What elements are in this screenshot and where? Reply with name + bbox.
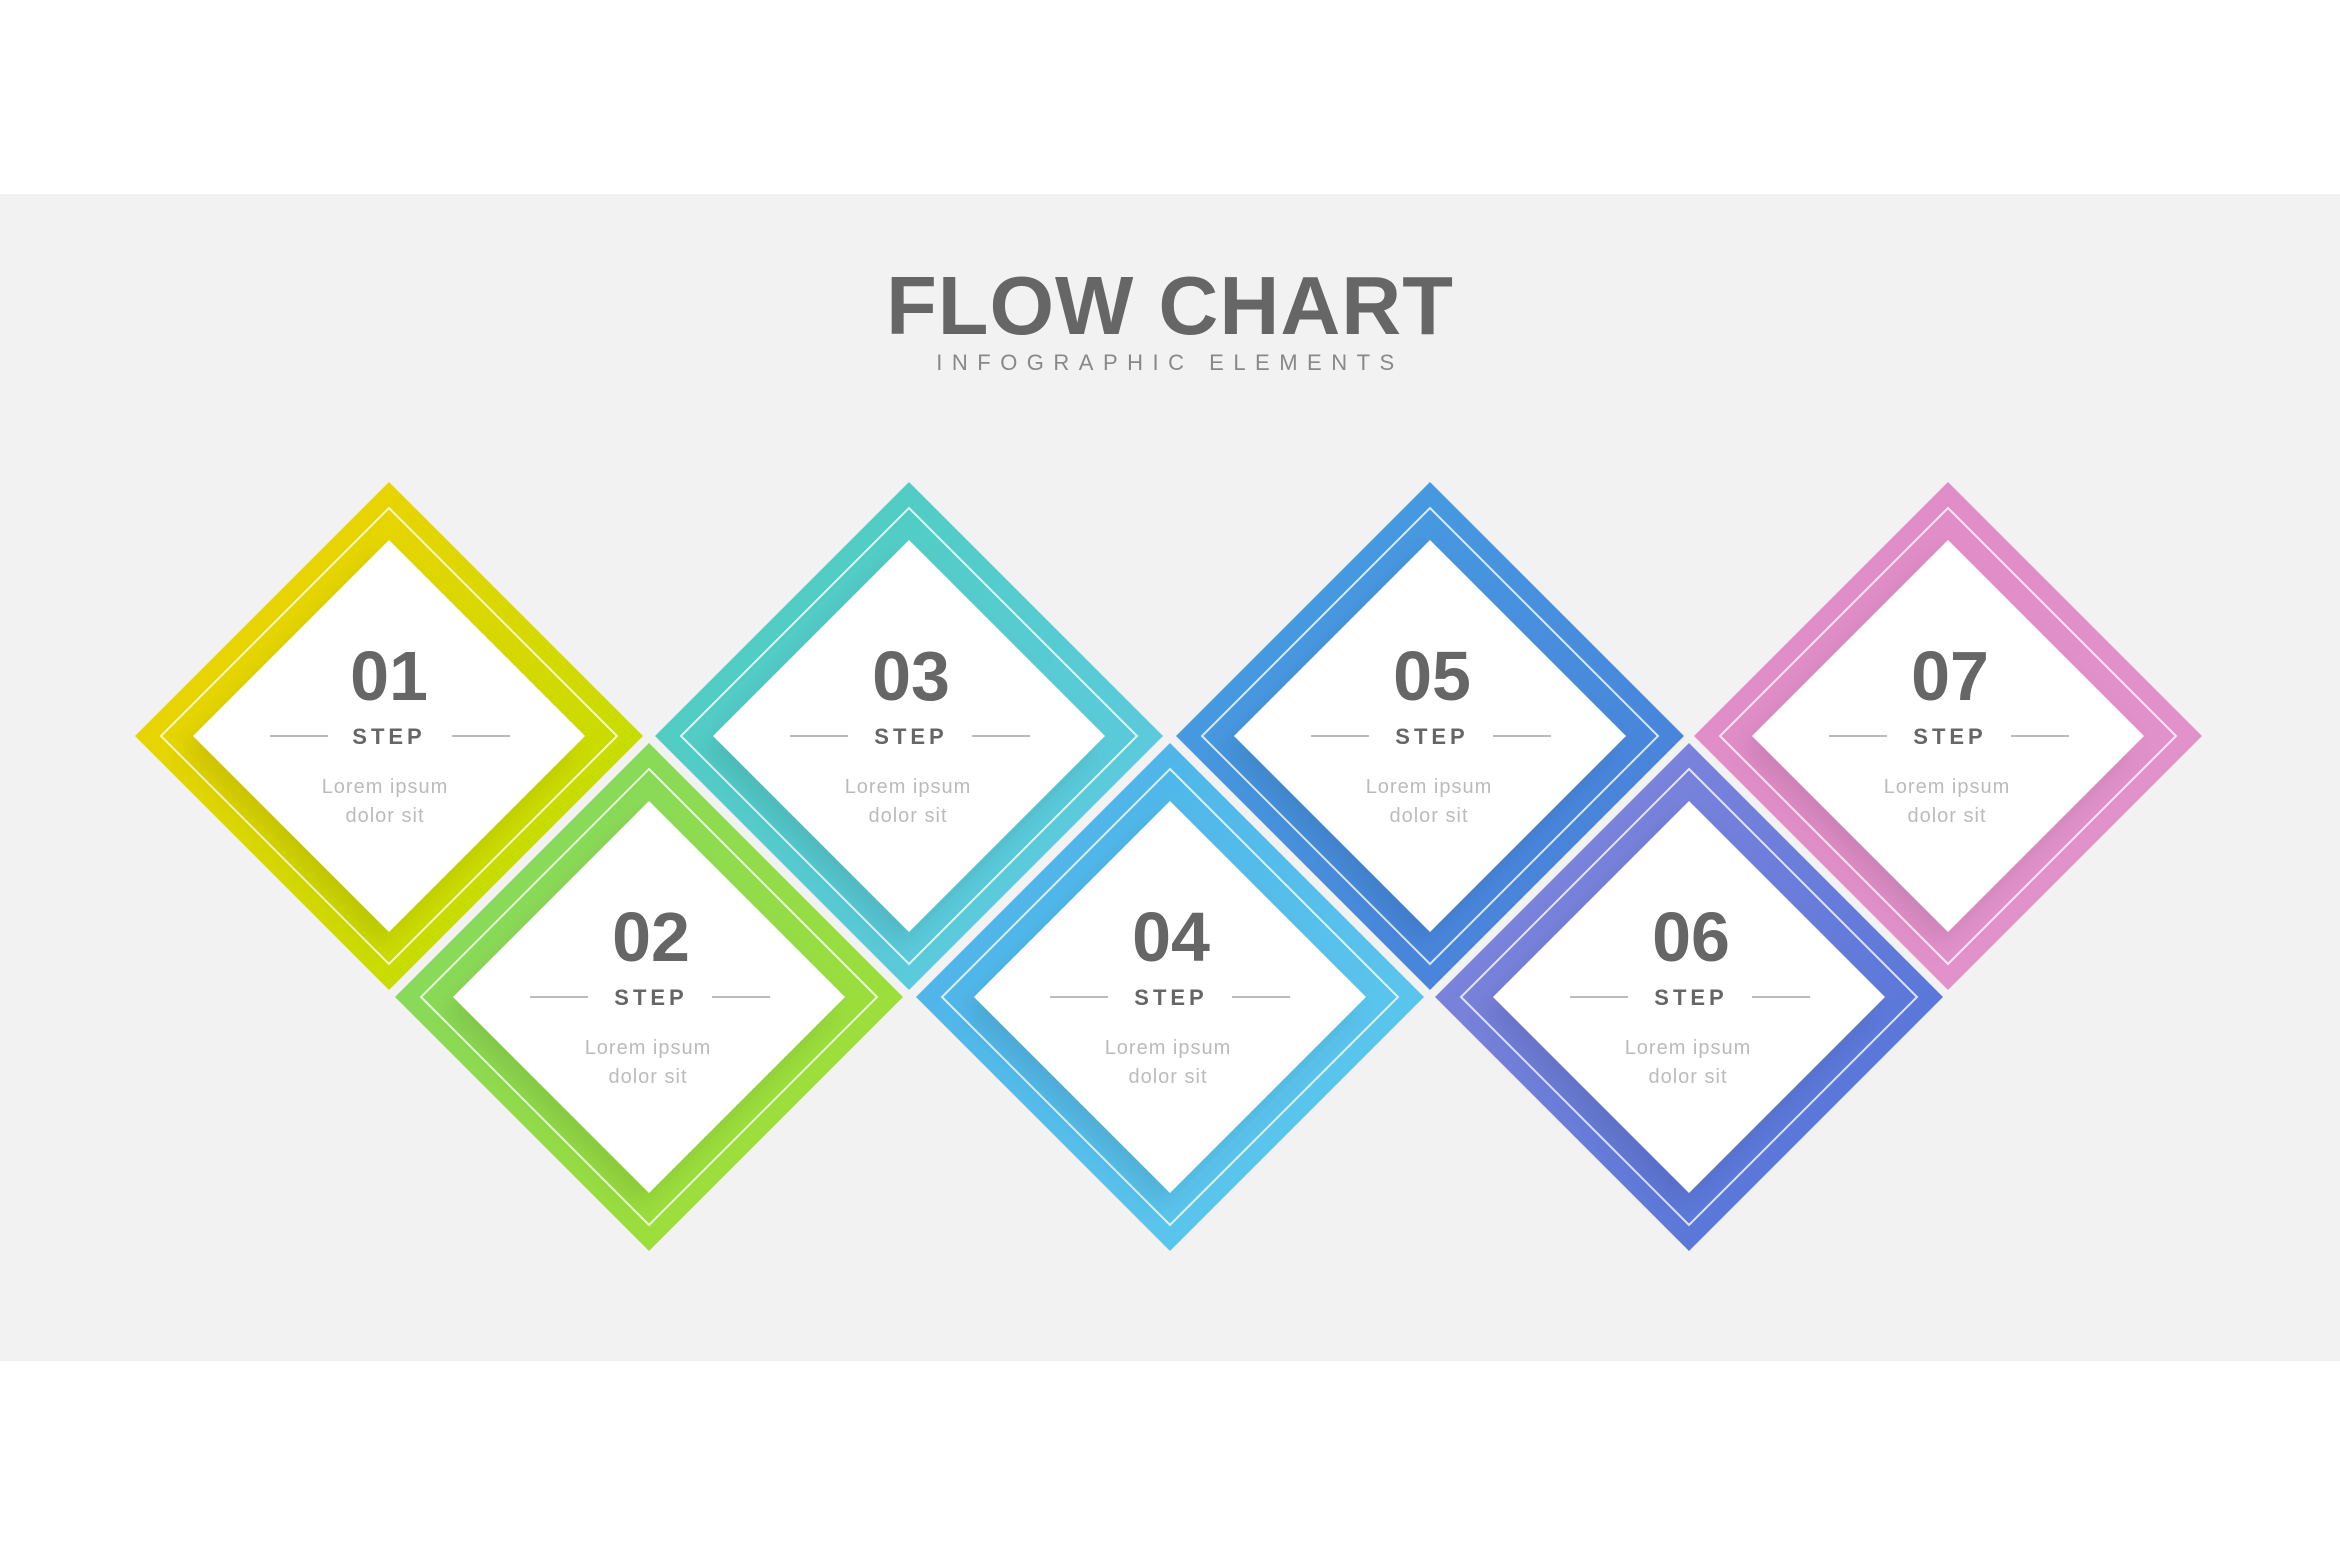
step texts: 05 xyxy=(1393,637,1471,715)
subtitle: INFOGRAPHIC ELEMENTS xyxy=(936,350,1404,375)
frame: step 02 xyxy=(395,743,903,1251)
step texts: dolor sit xyxy=(1128,1066,1208,1088)
frame: step 04 xyxy=(916,743,1424,1251)
step texts: STEP xyxy=(1654,985,1728,1010)
background band xyxy=(0,194,2340,1361)
step texts: Lorem ipsum xyxy=(585,1037,711,1059)
frame: step 07 xyxy=(1694,482,2202,990)
step texts: STEP xyxy=(1395,724,1469,749)
step texts: Lorem ipsum xyxy=(1884,776,2010,798)
step texts: 06 xyxy=(1652,898,1730,976)
step texts: Lorem ipsum xyxy=(322,776,448,798)
step texts: STEP xyxy=(352,724,426,749)
step texts: 02 xyxy=(612,898,690,976)
frame: step 06 xyxy=(1435,743,1943,1251)
white cards xyxy=(193,540,2144,1193)
step texts: 04 xyxy=(1132,898,1210,976)
step texts: Lorem ipsum xyxy=(1625,1037,1751,1059)
step texts: Lorem ipsum xyxy=(1366,776,1492,798)
step texts: dolor sit xyxy=(1648,1066,1728,1088)
step texts: 01 xyxy=(350,637,428,715)
step texts: dolor sit xyxy=(868,805,948,827)
step texts: STEP xyxy=(874,724,948,749)
title: FLOW CHART xyxy=(886,259,1454,352)
frame: step 01 xyxy=(135,482,643,990)
step texts: dolor sit xyxy=(345,805,425,827)
step texts: STEP xyxy=(614,985,688,1010)
step texts: dolor sit xyxy=(1907,805,1987,827)
frame: step 05 xyxy=(1176,482,1684,990)
step texts: 07 xyxy=(1911,637,1989,715)
step texts: Lorem ipsum xyxy=(1105,1037,1231,1059)
frame: step 03 xyxy=(655,482,1163,990)
step texts: 03 xyxy=(872,637,950,715)
step texts: dolor sit xyxy=(1389,805,1469,827)
step texts: dolor sit xyxy=(608,1066,688,1088)
step texts: Lorem ipsum xyxy=(845,776,971,798)
step texts: STEP xyxy=(1134,985,1208,1010)
step texts: STEP xyxy=(1913,724,1987,749)
step texts xyxy=(270,637,2069,1088)
